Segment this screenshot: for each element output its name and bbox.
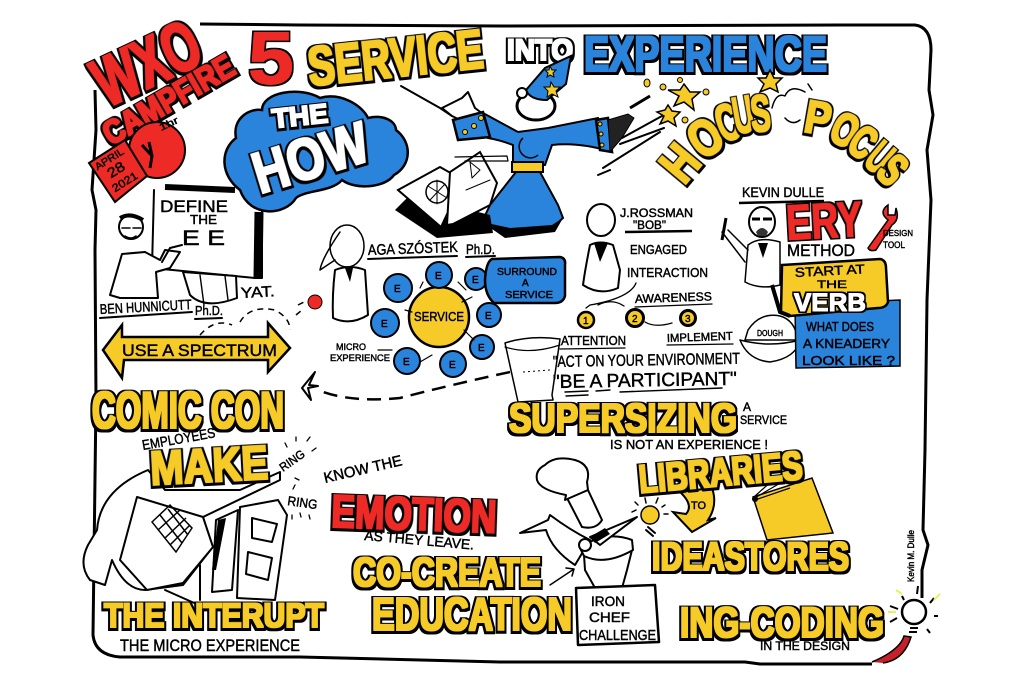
numbered steps: awareness, attention, implement: 3 bbox=[685, 314, 691, 325]
heading: HOCUS: H bbox=[648, 132, 712, 193]
numbered steps: awareness, attention, implement: ATTENTION bbox=[561, 333, 626, 348]
blue box: what does a kneadery look like bbox=[795, 300, 900, 368]
Aga Szostek figure bbox=[320, 225, 368, 321]
numbered steps: awareness, attention, implement bbox=[560, 283, 733, 349]
text: engaged interaction bbox=[627, 242, 708, 280]
heading: LIBRARIES: LIBRARIES bbox=[637, 444, 804, 502]
title: CAMPFIRE: CAMPFIRE bbox=[96, 47, 241, 152]
supersize cup bbox=[505, 338, 560, 402]
service diagram: service surrounded by E bubbles: SERVICE bbox=[414, 309, 464, 324]
service diagram: service surrounded by E bubbles: E bbox=[435, 271, 442, 282]
presenter name: J. Rossman Bob: "BOB" bbox=[633, 218, 666, 232]
service diagram: service surrounded by E bubbles bbox=[371, 262, 501, 377]
poof cloud between hocus and pocus bbox=[772, 84, 812, 128]
yellow box: start at the verb: VERB bbox=[794, 289, 866, 317]
numbered steps: awareness, attention, implement: 2 bbox=[632, 314, 638, 325]
bowl of dough bbox=[740, 315, 800, 362]
sign: define the EE: DEFINE bbox=[160, 197, 228, 216]
icon: yellow book bbox=[752, 478, 833, 540]
blue box: what does a kneadery look like: A KNEADERY bbox=[803, 336, 890, 351]
quote: act on your environment bbox=[553, 351, 740, 396]
heading: POCUS bbox=[801, 91, 917, 196]
heading: COMIC CON: COMIC CON bbox=[92, 382, 284, 440]
text: the micro experience: THE MICRO EXPERIENCE bbox=[120, 636, 300, 655]
label: micro experience: EXPERIENCE bbox=[330, 353, 390, 364]
service diagram: service surrounded by E bubbles: E bbox=[403, 357, 410, 368]
dashed arrow from cup to comic con bbox=[302, 372, 510, 400]
Ben Hunnicutt figure bbox=[110, 215, 237, 305]
label: micro experience bbox=[330, 342, 390, 364]
icon: light bulb with red cord bbox=[872, 586, 940, 663]
yellow box: start at the verb: THE bbox=[817, 279, 847, 291]
heading: ERY: ERY bbox=[785, 191, 863, 251]
text: engaged interaction: INTERACTION bbox=[627, 265, 708, 280]
heading: HOCUS bbox=[648, 84, 773, 193]
heading: SUPERSIZING: SUPERSIZING bbox=[509, 395, 737, 441]
numbered steps: awareness, attention, implement: AWARENESS bbox=[635, 289, 712, 306]
presenter name: Ben Hunnicutt: Ph.D. bbox=[195, 303, 223, 318]
label: micro experience: MICRO bbox=[336, 342, 366, 353]
heading: IDEASTORES: IDEASTORES bbox=[652, 535, 849, 579]
arrow to chef bbox=[550, 568, 574, 585]
service diagram: service surrounded by E bubbles: E bbox=[485, 311, 492, 322]
arrow: to bbox=[673, 488, 716, 532]
presenter name: Ben Hunnicutt: BEN HUNNICUTT bbox=[99, 296, 192, 317]
heading: EDUCATION: EDUCATION bbox=[372, 588, 572, 640]
text: engaged interaction: ENGAGED bbox=[630, 242, 687, 257]
box: iron chef challenge: CHALLENGE bbox=[579, 627, 656, 644]
service diagram: service surrounded by E bubbles: E bbox=[394, 284, 401, 295]
label: design tool bbox=[883, 228, 913, 250]
sound: ring ring: RING bbox=[277, 447, 308, 474]
presenter name: J. Rossman Bob bbox=[620, 206, 693, 232]
thought cloud: the how: HOW bbox=[245, 110, 377, 206]
callout: surround a service: SURROUND bbox=[497, 266, 557, 278]
heading: EMOTION: EMOTION bbox=[331, 485, 497, 543]
callout: surround a service bbox=[485, 257, 565, 303]
heading: POCUS: O bbox=[823, 102, 867, 159]
sign: define the EE: THE bbox=[190, 212, 217, 227]
magic stars and sparks bbox=[644, 70, 782, 126]
spectrum double arrow bbox=[103, 323, 290, 378]
quote: act on your environment: "ACT ON YOUR ENVIRONMENT bbox=[553, 351, 740, 371]
magic trails from wand bbox=[598, 116, 664, 175]
box: iron chef challenge: IRON bbox=[591, 593, 625, 609]
heading: THE INTERUPT: THE INTERUPT bbox=[104, 597, 324, 635]
blue box: what does a kneadery look like: LOOK LIKE ? bbox=[802, 353, 895, 368]
icon: red wrench bbox=[868, 205, 897, 251]
service diagram: service surrounded by E bubbles: E bbox=[381, 319, 388, 330]
service diagram: service surrounded by E bubbles: E bbox=[478, 343, 485, 354]
text: employees: EMPLOYEES bbox=[141, 424, 216, 453]
text: know the: KNOW THE bbox=[322, 452, 404, 487]
icon: idea light bulb bbox=[632, 498, 668, 536]
Kevin Dulle figure bbox=[722, 207, 780, 287]
iron chef illustration bbox=[520, 458, 637, 588]
hand-drawn border frame bbox=[92, 24, 933, 664]
date badge: April 28 2021 and clock bbox=[89, 115, 185, 202]
text: method: METHOD bbox=[787, 241, 855, 260]
arrow: to: TO bbox=[691, 500, 707, 512]
title: EXPERIENCE: EXPERIENCE bbox=[584, 26, 827, 82]
label: design tool: TOOL bbox=[883, 240, 905, 250]
sign: define the EE bbox=[152, 187, 262, 278]
date badge: April 28 2021 and clock: 1hr bbox=[158, 115, 181, 134]
callout: surround a service: A bbox=[522, 278, 529, 289]
heading: HOCUS: U bbox=[728, 84, 758, 145]
blue box: what does a kneadery look like: WHAT DOES bbox=[806, 319, 874, 334]
heading: POCUS: C bbox=[839, 116, 886, 170]
text: a service: SERVICE bbox=[740, 413, 787, 427]
sound: ring ring: RING bbox=[287, 493, 318, 512]
sign: define the EE: E E bbox=[182, 227, 225, 250]
wizard figure bbox=[401, 56, 650, 238]
thought cloud: the how: THE bbox=[270, 98, 329, 134]
numbered steps: awareness, attention, implement: 1 bbox=[583, 316, 589, 327]
title: into: INTO bbox=[507, 34, 573, 67]
presenter name: J. Rossman Bob: J.ROSSMAN bbox=[620, 206, 693, 220]
YAT label: YAT. bbox=[240, 283, 275, 302]
service diagram: service surrounded by E bubbles: E bbox=[472, 275, 479, 286]
box: iron chef challenge: CHEF bbox=[589, 609, 630, 625]
heading: POCUS: P bbox=[801, 91, 835, 147]
heading: CO-CREATE: CO-CREATE bbox=[353, 549, 541, 595]
text: a service: A bbox=[743, 400, 751, 414]
text: is not an experience: IS NOT AN EXPERIENCE ! bbox=[610, 437, 768, 452]
presenter name: Kevin Dulle: KEVIN DULLE bbox=[742, 184, 824, 200]
heading: HOCUS: C bbox=[707, 92, 748, 154]
service diagram: service surrounded by E bubbles: E bbox=[449, 360, 456, 371]
text: as they leave: AS THEY LEAVE. bbox=[364, 527, 475, 553]
spectrum double arrow: USE A SPECTRUM bbox=[122, 341, 277, 360]
quote: act on your environment: "BE A PARTICIPANT" bbox=[553, 369, 737, 393]
presenter name: Aga Szostek: AGA SZÓSTEK bbox=[368, 239, 458, 259]
title: SERVICE: SERVICE bbox=[305, 17, 486, 98]
hand knocking at door illustration bbox=[83, 470, 287, 610]
title: 5: 5 bbox=[248, 17, 294, 100]
heading: POCUS: S bbox=[867, 145, 917, 196]
date badge: April 28 2021 and clock: 28 bbox=[104, 158, 128, 181]
heading: MAKE: MAKE bbox=[149, 437, 269, 496]
Bob Rossman figure bbox=[583, 204, 620, 291]
numbered steps: awareness, attention, implement: IMPLEMENT bbox=[667, 331, 733, 345]
date badge: April 28 2021 and clock: 2021 bbox=[110, 170, 140, 195]
heading: HOCUS: O bbox=[676, 105, 734, 170]
open spell book bbox=[395, 152, 508, 238]
yellow box: start at the verb: START AT bbox=[794, 261, 865, 280]
callout: surround a service: SERVICE bbox=[505, 289, 553, 301]
yellow box: start at the verb bbox=[772, 259, 888, 317]
box: iron chef challenge bbox=[576, 585, 659, 645]
heading: HOCUS: S bbox=[748, 85, 773, 144]
date badge: April 28 2021 and clock: APRIL bbox=[93, 146, 127, 173]
sound: ring ring bbox=[277, 437, 318, 519]
text: a service bbox=[740, 400, 787, 427]
red bouncing ball bbox=[200, 295, 322, 335]
heading: POCUS: U bbox=[855, 132, 903, 184]
text: in the design: IN THE DESIGN bbox=[760, 639, 850, 653]
bowl of dough: DOUGH bbox=[757, 329, 783, 338]
signature: Kevin M. Dulle bbox=[906, 530, 916, 582]
label: design tool: DESIGN bbox=[883, 228, 913, 238]
heading: ING-CODING: ING-CODING bbox=[680, 599, 884, 647]
presenter name: Aga Szostek: Ph.D. bbox=[466, 241, 495, 257]
